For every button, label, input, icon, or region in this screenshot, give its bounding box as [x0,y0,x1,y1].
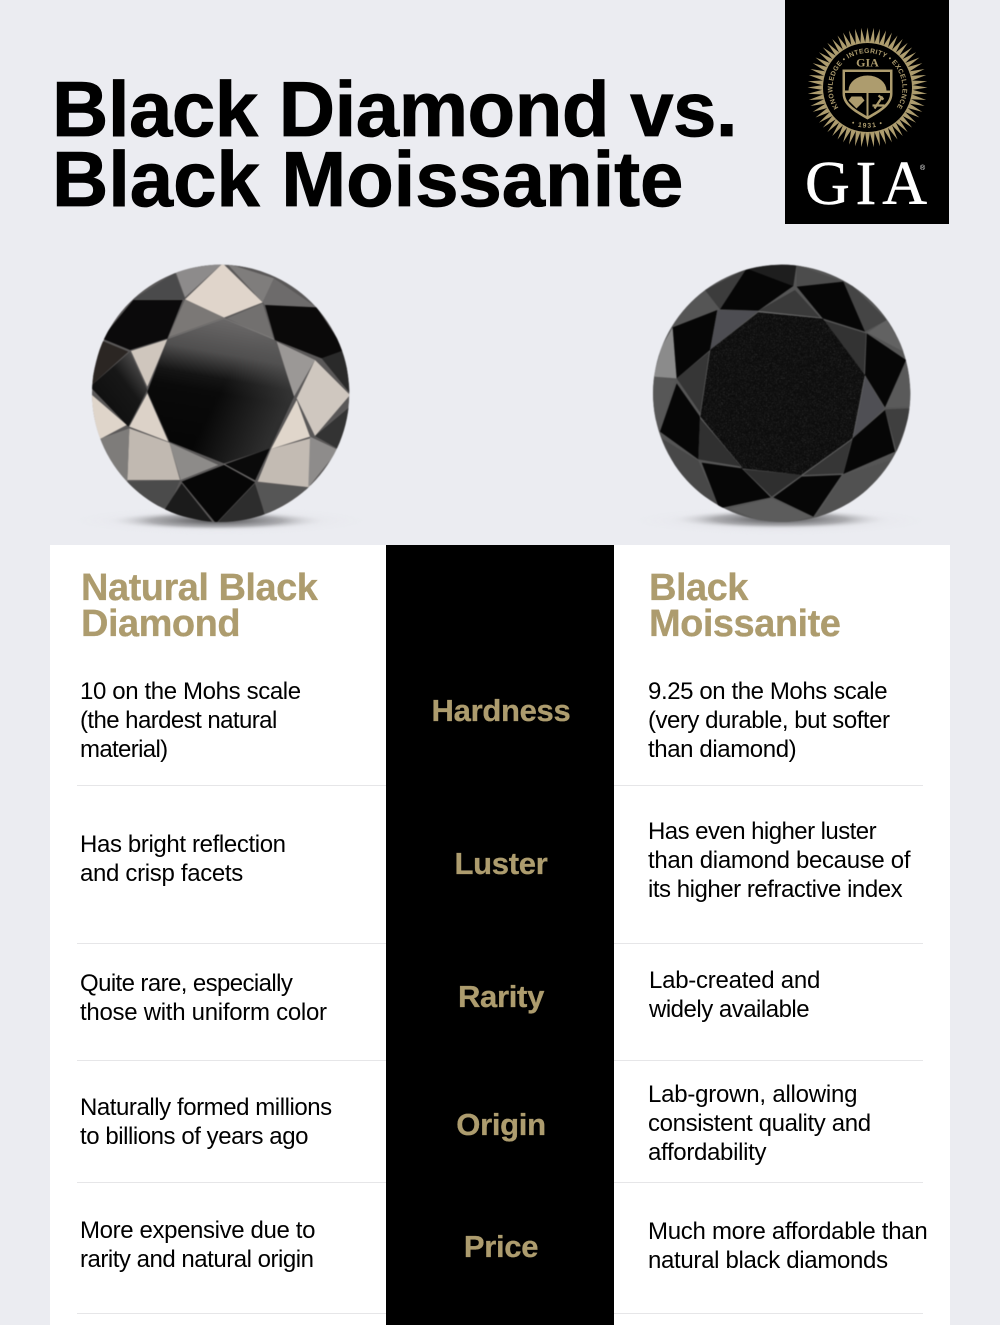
text: diamond price: More expensive due to [80,1217,315,1244]
text: moissanite origin: affordability [648,1139,766,1166]
logo: GIA [785,0,949,224]
icon: GIA seal: GIA [856,56,879,70]
text: moissanite rarity: widely available [649,996,809,1023]
text: moissanite luster: Has even higher luster [648,818,876,845]
text: moissanite luster: than diamond because of [648,847,910,874]
label: luster: Luster [455,846,547,881]
text: diamond rarity [80,970,327,1026]
text: moissanite hardness: than diamond) [648,736,796,763]
label: rarity: Rarity [458,979,544,1014]
text: moissanite origin: Lab-grown, allowing [648,1081,857,1108]
text: diamond hardness: material) [80,736,168,763]
icon: black moissanite [652,264,912,529]
text: diamond luster [80,831,286,887]
text: moissanite hardness: (very durable, but softer [648,707,889,734]
panel: center black column [386,545,614,1325]
text: moissanite rarity: Lab-created and [649,967,820,994]
logo: GIA: ® [920,164,926,172]
title: Black Moissanite [52,135,683,223]
text: moissanite origin: consistent quality and [648,1110,871,1137]
text: diamond price [80,1217,315,1273]
heading: black moissanite: Moissanite [649,603,840,645]
heading: natural black diamond: Natural Black [81,567,317,609]
logo wordmark: GIA [805,150,927,218]
text: diamond rarity: those with uniform color [80,999,327,1026]
text: moissanite luster [648,818,911,903]
text: diamond price: rarity and natural origin [80,1246,313,1273]
heading: natural black diamond [81,567,318,645]
text: moissanite rarity [649,967,820,1023]
text: diamond luster: Has bright reflection [80,831,286,858]
icon: GIA seal [808,28,928,148]
text: diamond hardness: 10 on the Mohs scale [80,678,301,705]
text: diamond hardness: (the hardest natural [80,707,277,734]
icon: GIA seal: KNOWLEDGE • INTEGRITY • EXCELLENCE [828,48,908,110]
heading: black moissanite [649,567,840,645]
panel: comparison table [50,545,950,1325]
label: origin: Origin [456,1107,546,1142]
icon: natural black diamond [91,264,350,530]
text: diamond rarity: Quite rare, especially [80,970,292,997]
title [52,65,737,223]
text: moissanite price: natural black diamonds [648,1247,888,1274]
text: diamond origin: to billions of years ago [80,1123,308,1150]
label: price: Price [464,1229,538,1264]
text: moissanite price [648,1218,927,1274]
text: moissanite price: Much more affordable than [648,1218,927,1245]
text: moissanite origin [648,1081,871,1166]
icon: GIA seal: • 1931 • [852,122,882,128]
text: diamond luster: and crisp facets [80,860,243,887]
label: hardness: Hardness [432,693,570,728]
text: diamond origin [80,1094,332,1150]
text: diamond hardness [80,678,301,763]
heading: natural black diamond: Diamond [81,603,240,645]
text: moissanite luster: its higher refractive index [648,876,902,903]
text: diamond origin: Naturally formed millions [80,1094,332,1121]
heading: black moissanite: Black [649,567,748,609]
text: moissanite hardness [648,678,890,763]
title: Black Diamond vs. [52,65,737,153]
text: moissanite hardness: 9.25 on the Mohs scale [648,678,887,705]
